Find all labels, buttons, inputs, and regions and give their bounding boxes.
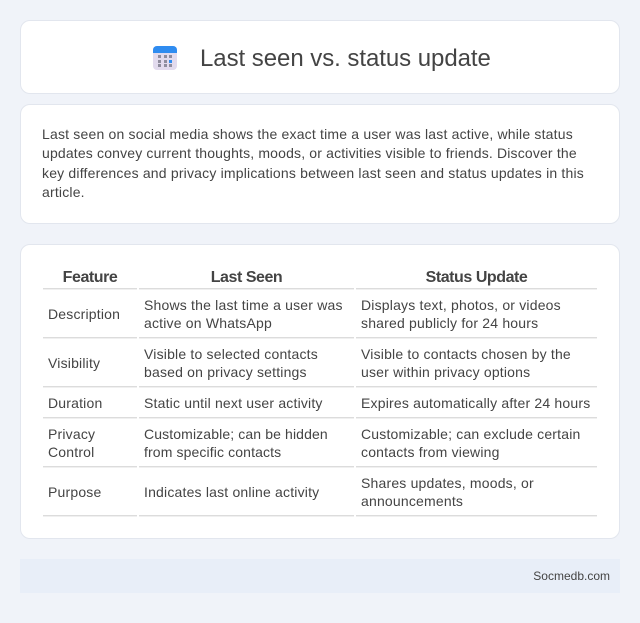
cell: last seen description: Shows the last time a user was [144,297,343,313]
row label: Privacy Control: Privacy [48,426,95,442]
row label: Duration: Duration [48,395,102,411]
text: intro paragraph: Last seen on social media shows the exact time a user was last active, while status [42,126,573,142]
footer bar [20,559,620,593]
cell: status description: Displays text, photos, or videos [361,297,561,313]
cell: last seen privacy: Customizable; can be hidden [144,426,328,442]
cell: status visibility: Visible to contacts chosen by the [361,346,571,362]
cell: last seen duration: Static until next user activity [144,395,323,411]
cell: last seen description [144,297,343,331]
table header: Status Update: Status Update [426,269,527,286]
row label: Purpose: Purpose [48,484,101,500]
text: intro paragraph: article. [42,184,85,200]
panel: title card [20,20,620,94]
cell: status visibility [361,346,571,380]
text: intro paragraph [42,126,584,200]
table header: Feature: Feature [63,269,117,286]
cell: status purpose [361,475,534,509]
row label: Visibility: Visibility [48,355,100,371]
cell: last seen privacy: from specific contacts [144,444,281,460]
text: intro paragraph: updates convey current thoughts, moods, or activities visible to friends. Discover the [42,145,577,161]
cell: status privacy: Customizable; can exclude certain [361,426,580,442]
row label: Privacy Control: Control [48,444,94,460]
cell: status duration: Expires automatically after 24 hours [361,395,590,411]
cell: status purpose: Shares updates, moods, or [361,475,534,491]
cell: status description [361,297,561,331]
cell: last seen visibility: Visible to selected contacts [144,346,318,362]
cell: last seen privacy [144,426,328,460]
cell: last seen visibility [144,346,318,380]
footer text: Socmedb.com [533,569,610,583]
icon: calendar [153,46,177,70]
row label: Privacy Control [48,426,95,460]
cell: status privacy [361,426,580,460]
cell: status privacy: contacts from viewing [361,444,500,460]
cell: status purpose: announcements [361,493,463,509]
title: Last seen vs. status update [200,45,491,72]
cell: last seen purpose: Indicates last online activity [144,484,319,500]
cell: last seen description: active on WhatsApp [144,315,272,331]
cell: last seen visibility: based on privacy settings [144,364,307,380]
text: intro paragraph: key differences and privacy implications between last seen and status updates in this [42,165,584,181]
cell: status description: shared publicly for 24 hours [361,315,538,331]
panel: comparison table [20,244,620,539]
table header: Last Seen: Last Seen [211,269,282,286]
cell: status visibility: user within privacy options [361,364,530,380]
panel: intro text [20,104,620,224]
row label: Description: Description [48,306,120,322]
